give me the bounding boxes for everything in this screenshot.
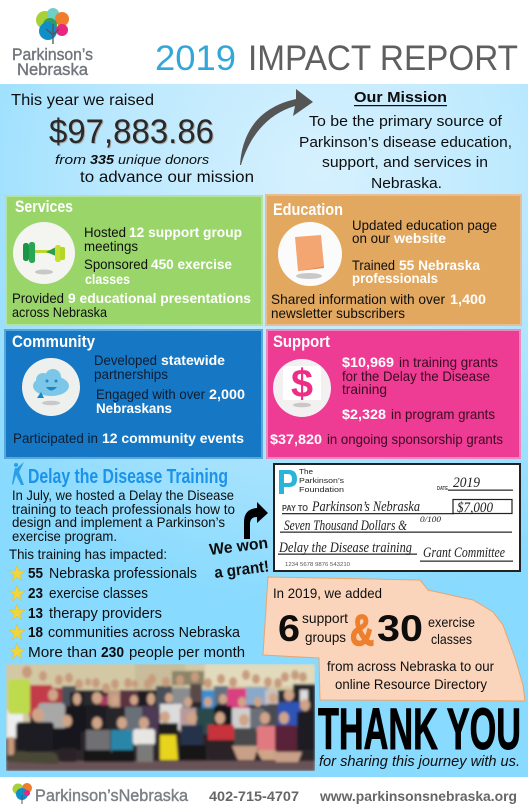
grant check: Seven Thousand Dollars & xyxy=(284,518,407,534)
panel: services: meetings xyxy=(84,238,138,254)
grant check: Delay the Disease training xyxy=(278,540,412,556)
panel: education: professionals xyxy=(352,270,438,286)
panel: education: website xyxy=(393,230,446,246)
panel: community: Engaged with over xyxy=(96,386,205,402)
fundraising total: 335 xyxy=(90,152,115,167)
panel: support: $37,820 xyxy=(270,431,322,447)
title: IMPACT REPORT xyxy=(248,39,518,78)
grant check: The xyxy=(299,469,313,476)
panel: services: Provided xyxy=(12,290,64,306)
mission statement: Our Mission xyxy=(354,89,447,106)
training impact list: 13 xyxy=(28,605,43,622)
thank you message: for sharing this journey with us. xyxy=(319,753,520,770)
grant check: $7,000 xyxy=(457,500,493,516)
panel: support: in program grants xyxy=(391,406,495,422)
training impact list xyxy=(9,546,245,661)
grant check: PAY TO xyxy=(282,504,308,513)
logo: Parkinson's Nebraska: Nebraska xyxy=(17,60,89,79)
grant check: Grant Committee xyxy=(423,545,505,561)
callout: we won a grant: a grant! xyxy=(213,558,270,582)
panel: education: 1,400 xyxy=(450,291,486,307)
panel: community xyxy=(5,330,262,458)
mission statement: To be the primary source of xyxy=(309,113,503,130)
footer: Parkinson’sNebraska xyxy=(35,786,189,805)
training description: exercise program. xyxy=(12,528,117,544)
training impact list: This training has impacted: xyxy=(9,546,167,562)
fundraising total: This year we raised xyxy=(11,92,154,109)
icon: running figure xyxy=(12,462,24,485)
panel: education: Shared information with over xyxy=(271,291,445,307)
panel: education xyxy=(266,195,521,325)
panel: services: classes xyxy=(85,271,130,287)
panel: support: $10,969 xyxy=(342,354,394,370)
icon: dollar sign xyxy=(273,359,331,417)
Nebraska shape callout: 30 xyxy=(377,608,423,649)
fundraising total: from xyxy=(55,152,86,167)
mission statement: support, and services in xyxy=(322,154,488,171)
Nebraska shape callout: 6 xyxy=(278,608,300,649)
panel: education: Updated education page xyxy=(352,217,497,233)
Nebraska shape callout: from across Nebraska to our xyxy=(327,658,494,674)
panel: community: Community xyxy=(12,332,95,351)
star bullets xyxy=(9,565,25,659)
fundraising total xyxy=(11,92,254,186)
Nebraska shape callout: In 2019, we added xyxy=(273,585,382,601)
panel: education: 55 Nebraska xyxy=(399,257,480,273)
Nebraska shape callout: support xyxy=(302,610,348,626)
Nebraska shape callout: online Resource Directory xyxy=(335,676,487,692)
panel: services: Sponsored xyxy=(84,256,148,272)
logo: Parkinson's Nebraska: Parkinson’s xyxy=(12,45,93,64)
Nebraska shape callout: & xyxy=(350,606,374,655)
panel: education: on our xyxy=(352,230,390,246)
mission statement: Parkinson’s disease education, xyxy=(299,134,512,151)
Nebraska shape callout xyxy=(263,577,525,701)
training impact list: people per month xyxy=(129,644,245,661)
callout: we won a grant xyxy=(208,535,270,582)
Delay the Disease heading xyxy=(12,462,228,488)
panel: education: newsletter subscribers xyxy=(271,305,405,321)
footer: 402-715-4707 xyxy=(209,788,299,804)
training impact list: 55 xyxy=(28,565,43,582)
footer: www.parkinsonsnebraska.org xyxy=(319,788,517,804)
panel: services: Services xyxy=(15,197,73,216)
tall man at left xyxy=(7,666,32,755)
panel: support xyxy=(267,330,520,458)
panel: support: for the Delay the Disease xyxy=(342,368,490,384)
mission statement xyxy=(299,89,512,192)
panel: support: in ongoing sponsorship grants xyxy=(327,431,503,447)
training impact list: More than xyxy=(28,644,97,661)
panel: community: statewide xyxy=(161,352,225,368)
panel: services: Hosted xyxy=(84,224,126,240)
grant check: 0/100 xyxy=(420,515,441,524)
panel: community: partnerships xyxy=(94,366,168,382)
Nebraska shape callout: exercise xyxy=(428,614,475,630)
callout: we won a grant: We won xyxy=(208,535,269,559)
grant check xyxy=(274,464,520,571)
training description xyxy=(12,487,235,544)
panel: community: Participated in xyxy=(13,430,98,446)
footer xyxy=(0,777,528,808)
training impact list: 23 xyxy=(28,585,43,602)
training impact list: 18 xyxy=(28,624,43,641)
training impact list: Nebraska professionals xyxy=(49,565,197,582)
title: 2019 xyxy=(155,39,236,78)
Delay the Disease heading: Delay the Disease Training xyxy=(28,466,228,488)
front row xyxy=(10,722,302,764)
panel: community: 2,000 xyxy=(209,386,245,402)
training impact list: communities across Nebraska xyxy=(48,624,241,641)
arrow to check xyxy=(244,502,268,539)
panel: community: 12 community events xyxy=(102,430,244,446)
grant check: Parkinson’s Nebraska xyxy=(311,499,420,515)
training description: design and implement a Parkinson’s xyxy=(12,514,225,530)
icon: Parkinson's Foundation P xyxy=(279,470,297,494)
panel: services: 12 support group xyxy=(129,224,242,240)
group photo xyxy=(6,664,315,771)
panel: support: training xyxy=(342,381,387,397)
panel: education: Education xyxy=(273,200,343,219)
grant check: 1234 5678 9876 543210 xyxy=(285,562,350,568)
panel: support: $2,328 xyxy=(342,406,386,422)
fundraising total: unique donors xyxy=(118,152,210,167)
panel: education: Trained xyxy=(352,257,395,273)
icon: dollar sign: $ xyxy=(291,362,313,406)
Nebraska shape callout: classes xyxy=(431,631,472,647)
back row xyxy=(29,684,315,720)
training description: In July, we hosted a Delay the Disease xyxy=(12,487,234,503)
logo: Parkinson's Nebraska xyxy=(12,8,93,79)
Nebraska shape callout: groups xyxy=(305,629,346,645)
grant check: DATE xyxy=(437,486,449,492)
panel: support: Support xyxy=(273,332,330,351)
panel: services: across Nebraska xyxy=(12,304,107,320)
training impact list: 230 xyxy=(101,644,124,661)
panel: services xyxy=(6,196,262,325)
panel: community: Nebraskans xyxy=(96,400,172,416)
footer logo xyxy=(12,783,32,804)
fundraising total: to advance our mission xyxy=(80,169,254,186)
panel: community: Developed xyxy=(94,352,157,368)
fundraising total: $97,883.86 xyxy=(50,114,215,152)
grant check: Foundation xyxy=(299,487,344,494)
training impact list: exercise classes xyxy=(49,585,148,602)
panel: services: 450 exercise xyxy=(151,256,232,272)
grant check: 2019 xyxy=(453,475,480,491)
icon: book xyxy=(278,222,342,286)
icon: smiling cloud xyxy=(22,358,80,416)
grant check: Parkinson’s xyxy=(299,478,345,485)
icon: dumbbell xyxy=(13,222,75,284)
mission statement: Nebraska. xyxy=(371,175,442,192)
arrow to mission xyxy=(240,89,313,165)
panel: services: 9 educational presentations xyxy=(68,290,251,306)
training description: training to teach professionals how to xyxy=(12,501,235,517)
training impact list: therapy providers xyxy=(49,605,162,622)
fundraising total: $97,883.86 xyxy=(49,113,214,151)
middle row xyxy=(38,702,315,750)
panel: support: in training grants xyxy=(399,354,498,370)
